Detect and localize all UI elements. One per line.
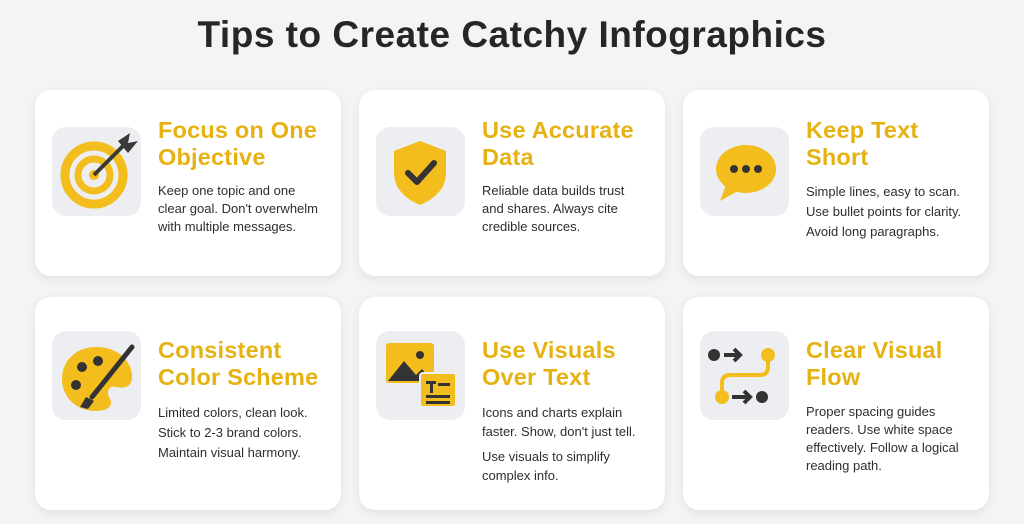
icon: speech bubble [700,127,789,216]
heading: Objective [158,144,266,170]
text: Limited colors, clean look. Stick to 2-3 brand colors. Maintain visual harmony. [158,405,308,460]
text: Simple lines, easy to scan. Use bullet points for clarity. Avoid long paragraphs. [806,184,961,239]
heading: Use Visuals [482,337,616,363]
text: Proper spacing guides readers. Use white space effectively. Follow a logical reading path. [806,404,959,473]
text [158,183,318,234]
heading [158,337,318,390]
heading [482,117,634,170]
heading: Over Text [482,364,590,390]
panel: use visuals over text [359,297,665,510]
heading: Data [482,144,534,170]
panel: keep text short [683,90,989,276]
text: Reliable data builds trust and shares. Always cite credible sources. [482,183,624,234]
heading: Keep Text [806,117,918,143]
heading [806,117,918,170]
heading [806,337,943,390]
icon: shield [376,127,465,216]
heading: Use Accurate [482,117,634,143]
panel: use accurate data [359,90,665,276]
panel: clear visual flow [683,297,989,510]
heading: Clear Visual [806,337,943,363]
heading: Consistent [158,337,281,363]
heading: Short [806,144,868,170]
heading: Color Scheme [158,364,318,390]
title: Tips to Create Catchy Infographics [198,14,826,55]
heading [482,337,616,390]
icon: palette [52,331,141,420]
heading: Flow [806,364,860,390]
icon: flow [700,331,789,420]
icon: target [52,127,141,216]
text: clear goal. Don't overwhelm with multiple messages. [158,201,318,234]
heading: Focus on One [158,117,317,143]
panel: focus on one objective [35,90,341,276]
text: Keep one topic and one [158,183,295,198]
heading [158,117,317,170]
icon: image and text [376,331,465,420]
text: Icons and charts explain faster. Show, don't just tell. Use visuals to simplify complex info. [482,405,636,483]
panel: consistent color scheme [35,297,341,510]
